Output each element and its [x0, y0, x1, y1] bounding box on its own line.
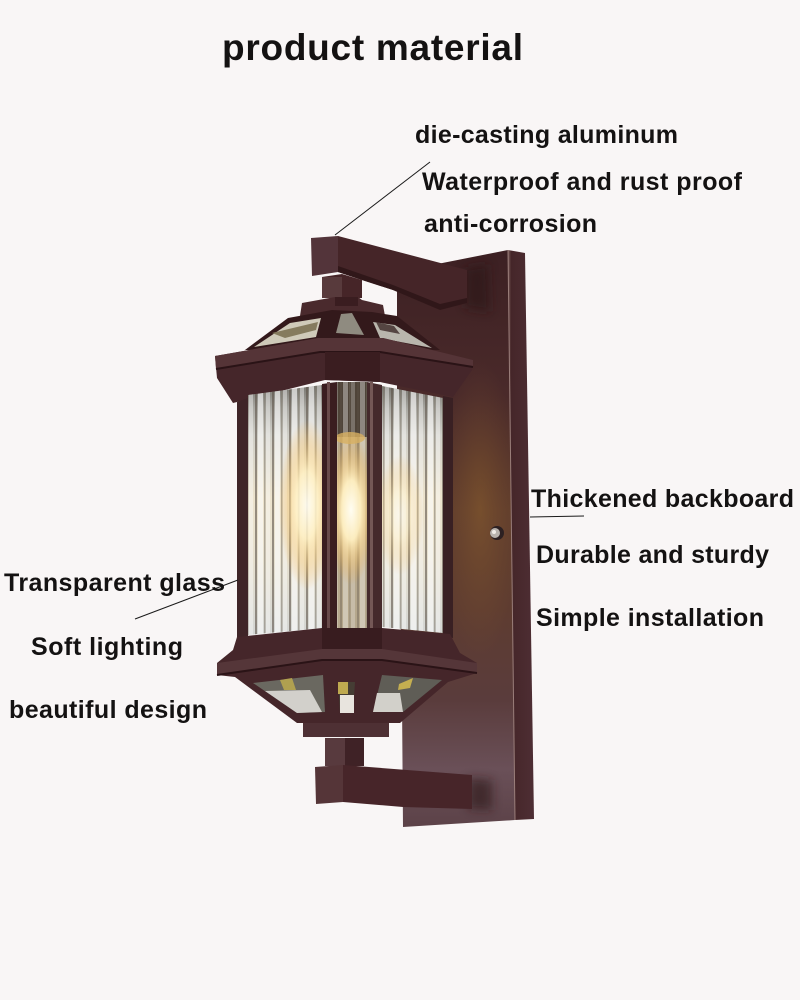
wall lamp: [215, 236, 534, 827]
screw: [490, 526, 504, 540]
callout: top arm: die-casting aluminum: [415, 121, 678, 149]
title: product material: [222, 27, 523, 68]
glass body: [237, 382, 453, 640]
callout: backboard: Simple installation: [536, 604, 764, 632]
callout: glass: Soft lighting: [31, 633, 183, 661]
callout: top arm: anti-corrosion: [424, 210, 597, 238]
callout: backboard: Durable and sturdy: [536, 541, 769, 569]
top mounting arm: [311, 236, 467, 310]
callout: backboard: [530, 485, 794, 632]
lower neck and base: [303, 723, 389, 766]
bottom mounting arm: [315, 765, 472, 809]
callout: glass: [4, 569, 238, 724]
callout: backboard: Thickened backboard: [531, 485, 794, 513]
left glass panel: [248, 385, 322, 635]
light glow: [279, 420, 424, 590]
callout: glass: Transparent glass: [4, 569, 225, 597]
callout: top arm: Waterproof and rust proof: [422, 168, 743, 196]
neck and cap: [300, 274, 385, 316]
backboard: [397, 250, 534, 827]
right glass panel: [382, 386, 443, 633]
upper eave: [215, 338, 473, 403]
centre glass panel: [337, 382, 367, 628]
lower housing: [217, 628, 477, 723]
callout: glass: beautiful design: [9, 696, 207, 724]
roof glass: [245, 310, 440, 350]
callout: top arm: [335, 121, 743, 238]
lower glass panes: [253, 675, 442, 713]
frame posts: [237, 382, 453, 640]
